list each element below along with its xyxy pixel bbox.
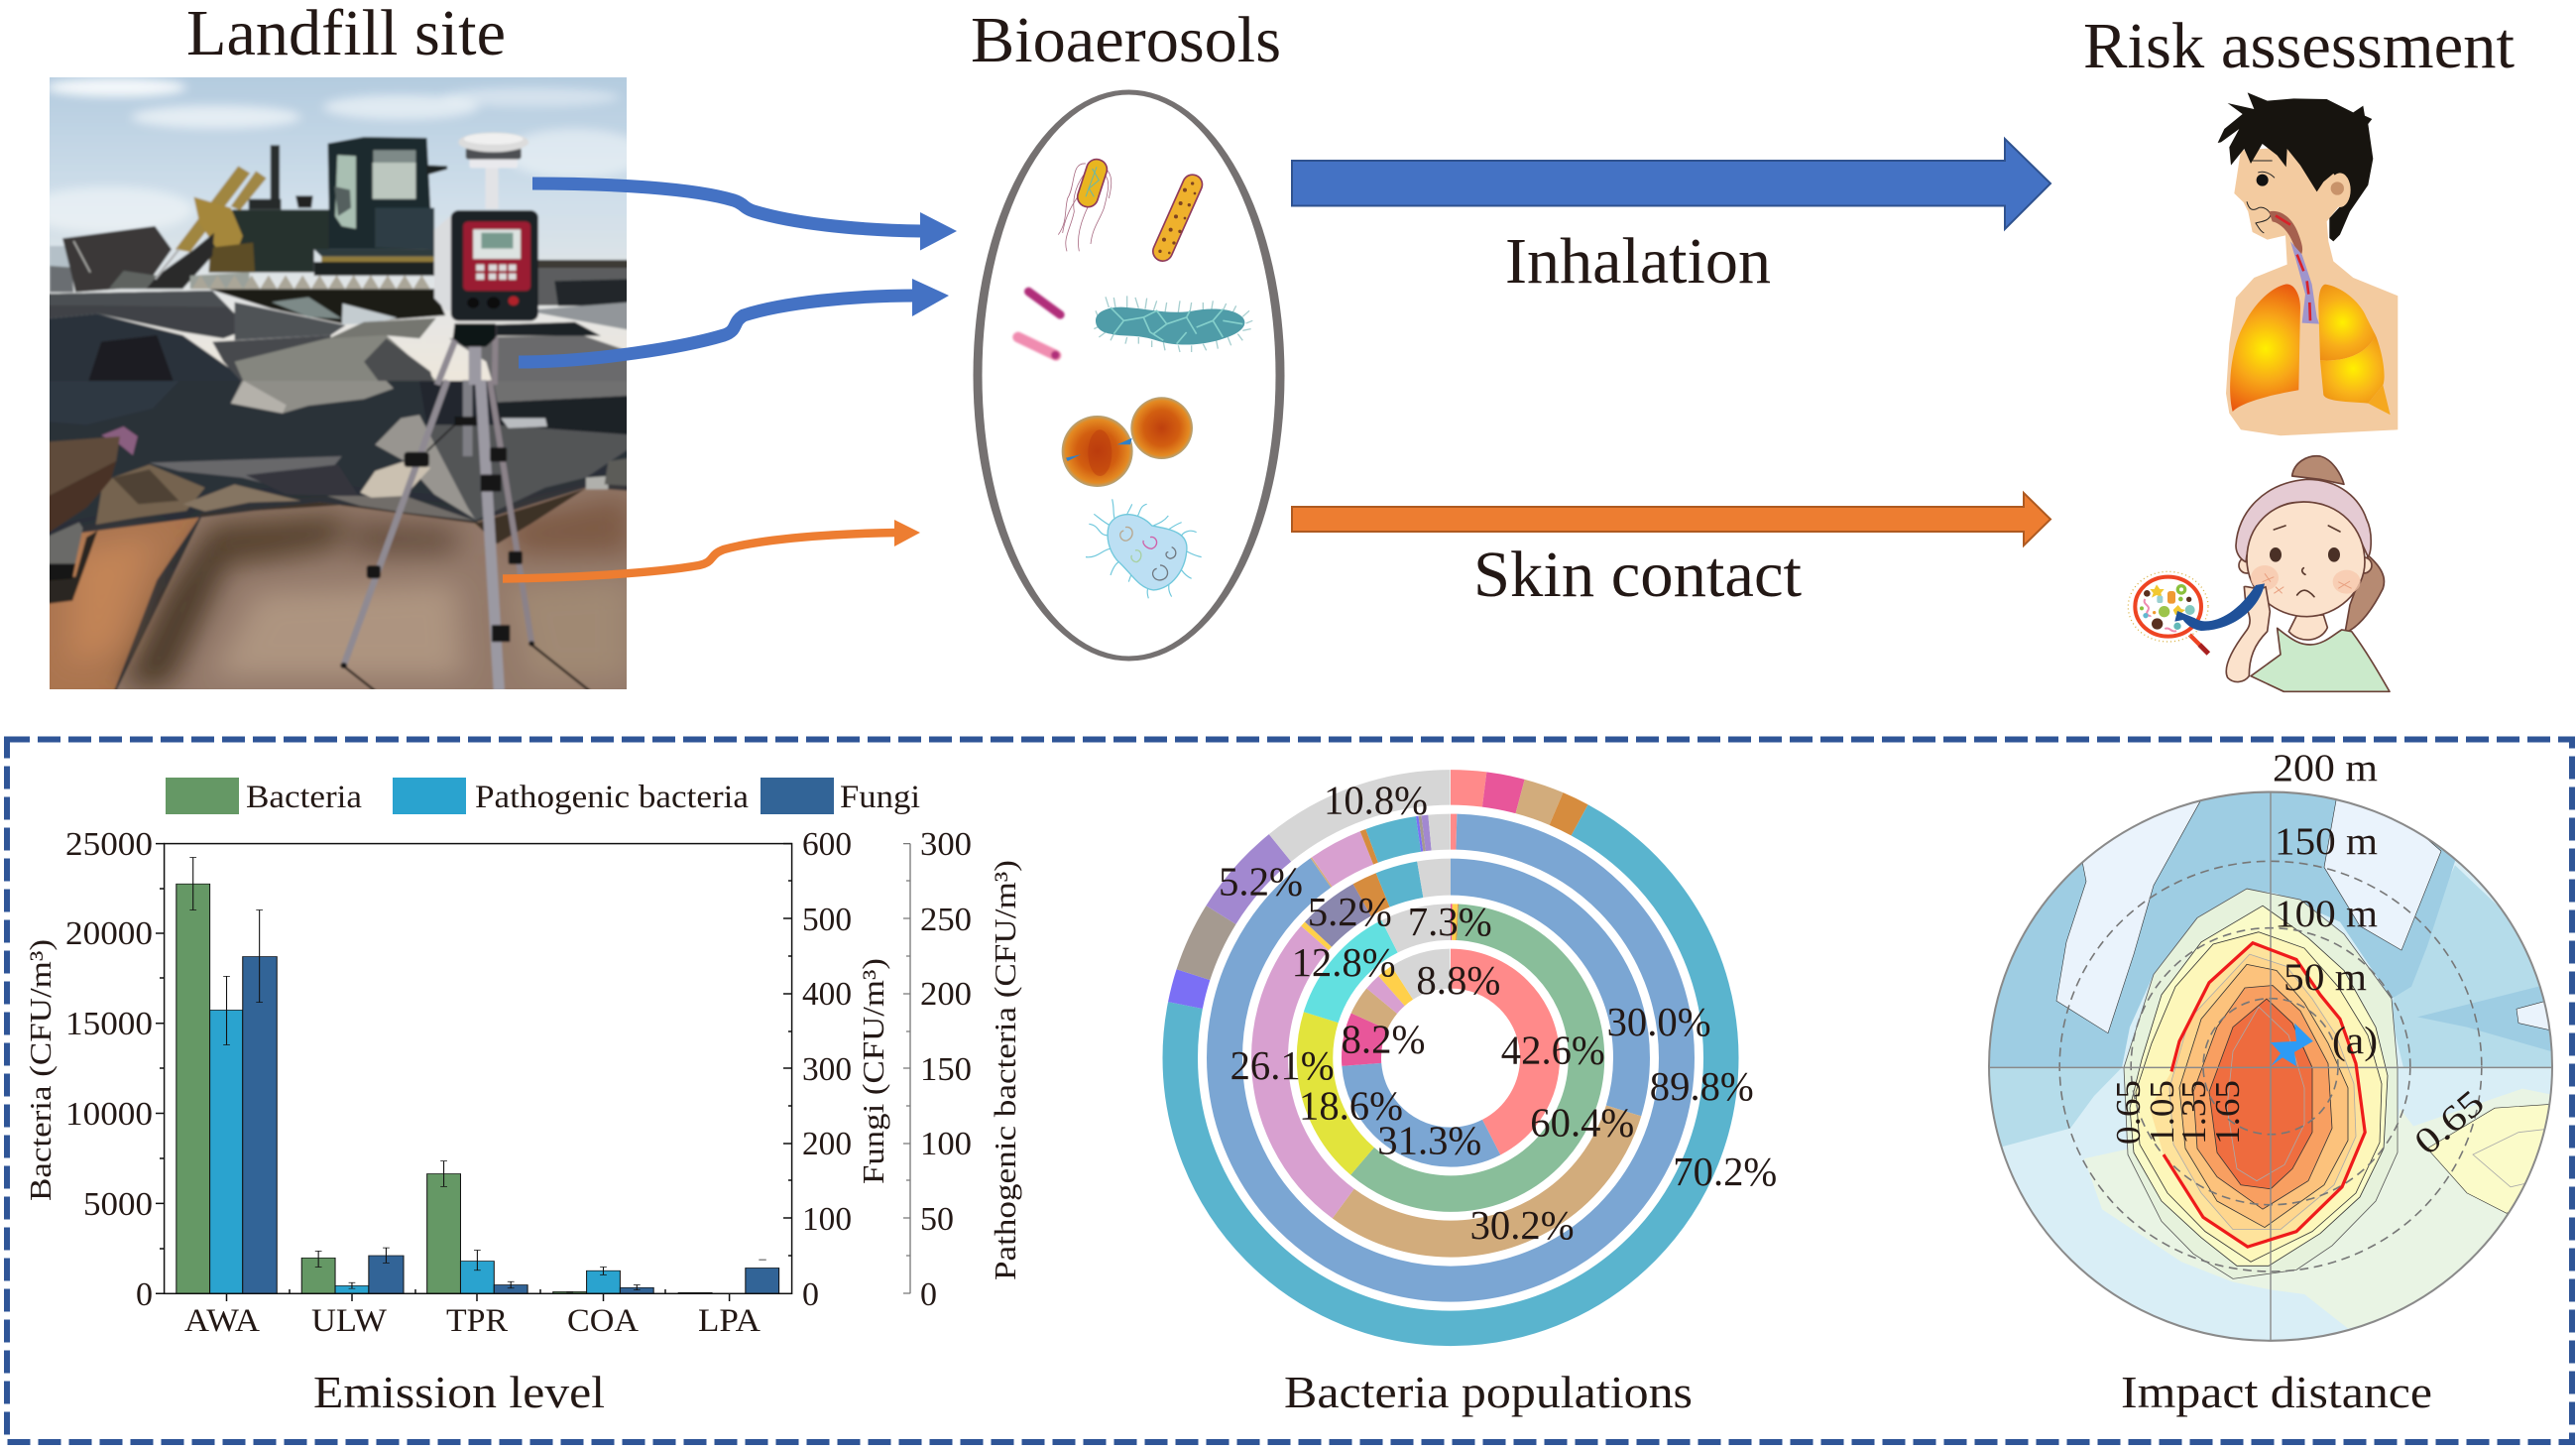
pathogenic axis labels (920, 826, 972, 1313)
distance labels: (a) (2332, 1020, 2378, 1062)
bar chart: emission level (23, 778, 1022, 1339)
heading: Impact distance: Impact distance (2121, 1367, 2432, 1417)
magnifier with germs (2128, 571, 2208, 654)
contour value labels: 1.65 (2208, 1080, 2247, 1145)
fungi axis labels: 0 (802, 1276, 819, 1313)
category labels: ULW (311, 1303, 388, 1339)
fungi axis labels (802, 826, 852, 1313)
icon: girl with skin irritation and magnifier (2128, 456, 2390, 691)
pathogenic axis labels: 300 (920, 826, 972, 863)
microbe illustrations (1018, 157, 1252, 598)
contour fields (1979, 781, 2566, 1347)
pathogenic axis labels: 100 (920, 1126, 972, 1162)
error bars (189, 857, 766, 1292)
legend (166, 778, 920, 815)
ring 2 (1225, 832, 1677, 1284)
label: Inhalation: Inhalation (1505, 225, 1771, 298)
donut percentage labels: 7.3% (1408, 899, 1492, 944)
contour value labels (2109, 1080, 2493, 1163)
icon: person with lungs (2218, 92, 2398, 435)
distance labels: 50 m (2283, 956, 2367, 999)
fungi axis labels: 200 (802, 1126, 852, 1162)
arrow: inhalation (1292, 139, 2050, 229)
tarp foreground (419, 424, 631, 521)
category labels (184, 1303, 761, 1339)
heading: Bacteria populations: Bacteria populations (1284, 1367, 1693, 1417)
donut percentage labels: 30.0% (1607, 999, 1711, 1044)
y axis title: fungi: Fungi (CFU/m³) (856, 958, 890, 1184)
distance labels: 100 m (2275, 893, 2378, 935)
y axis title: pathogenic bacteria: Pathogenic bacteria (CFU/m³) (988, 860, 1022, 1280)
left pipe debris (46, 531, 98, 604)
fungi axis labels: 300 (802, 1051, 852, 1088)
ground (46, 518, 199, 691)
donut percentage labels: 70.2% (1673, 1149, 1777, 1194)
arrow: blue curved flow 2 (519, 279, 949, 362)
photo upper half (24, 78, 645, 387)
donut percentage labels: 8.2% (1341, 1017, 1426, 1062)
sampler on tripod (434, 132, 538, 385)
donut percentage labels: 8.8% (1416, 957, 1500, 1003)
donut percentage labels: 60.4% (1530, 1099, 1634, 1145)
donut percentage labels: 12.8% (1292, 939, 1396, 985)
horizon scrap (50, 245, 71, 268)
legend: Pathogenic bacteria (475, 780, 749, 815)
microbe: blue amoeba (1086, 499, 1202, 598)
red threshold contour (2164, 943, 2365, 1247)
microbe: orange rod (1158, 181, 1196, 254)
title: Risk assessment: Risk assessment (2083, 10, 2515, 82)
donut percentage labels: 31.3% (1377, 1118, 1481, 1163)
axes (1979, 785, 2566, 1347)
pathogenic axis labels: 200 (920, 976, 972, 1013)
heading: Emission level: Emission level (313, 1367, 605, 1417)
bars (176, 857, 779, 1293)
arrow: skin contact (1292, 493, 2050, 545)
ring 3 (1269, 877, 1632, 1239)
legend: Fungi (840, 780, 920, 815)
title: Bioaerosols: Bioaerosols (971, 4, 1281, 76)
donut percentage labels: 89.8% (1650, 1063, 1754, 1109)
category labels: TPR (446, 1303, 508, 1339)
donut chart: bacteria populations (1180, 778, 1777, 1328)
range circles (2059, 861, 2482, 1271)
fungi axis labels: 600 (802, 826, 852, 863)
contour value labels: 0.65 (2406, 1082, 2493, 1163)
microbe: orange dividing cells (1062, 397, 1193, 487)
pathogenic axis labels: 0 (920, 1276, 937, 1313)
arrow: blue curved flow 1 (532, 183, 957, 250)
bulldozer (62, 137, 447, 324)
icon: wind rose star (2271, 1024, 2313, 1066)
donut percentage labels: 10.8% (1324, 778, 1428, 823)
label: Skin contact: Skin contact (1473, 539, 1802, 611)
pathogenic axis labels: 150 (920, 1051, 972, 1088)
category labels: LPA (698, 1303, 761, 1339)
microbe: teal cell with hairs (1094, 296, 1252, 352)
legend: Bacteria (246, 780, 362, 815)
cloth and log (101, 426, 138, 455)
donut percentage labels: 18.6% (1299, 1083, 1403, 1129)
tripod shadows (344, 645, 590, 691)
debris and soil (208, 289, 445, 323)
distance labels (2273, 747, 2378, 1062)
panel: dashed border for results (7, 740, 2572, 1442)
arrow: orange curved flow (503, 520, 920, 579)
clouds (24, 78, 645, 233)
left axis labels: 25000 (65, 826, 153, 863)
left axis labels: 15000 (65, 1006, 153, 1042)
donut percentage labels: 5.2% (1308, 889, 1392, 934)
fungi axis labels: 100 (802, 1201, 852, 1238)
contour value labels: 1.35 (2174, 1080, 2213, 1145)
left axis labels (65, 826, 153, 1313)
distance labels: 200 m (2273, 747, 2378, 789)
tarp pieces (46, 291, 631, 387)
pathogenic axis labels: 250 (920, 902, 972, 938)
microbe: pink rods (1018, 292, 1060, 359)
category labels: COA (567, 1303, 639, 1339)
left axis labels: 20000 (65, 915, 153, 952)
ring 1 (1180, 787, 1721, 1328)
tripod legs lower (344, 380, 531, 691)
category labels: AWA (184, 1303, 260, 1339)
panel: bioaerosols ellipse with microbes (974, 89, 1285, 661)
ring 5 (1361, 969, 1540, 1148)
donut percentage labels: 5.2% (1219, 858, 1303, 904)
contour value labels: 0.65 (2109, 1080, 2148, 1145)
left axis labels: 0 (136, 1276, 153, 1313)
distance labels: 150 m (2275, 820, 2378, 863)
fungi axis labels: 500 (802, 902, 852, 938)
plot frame (165, 844, 792, 1293)
oval outline (974, 89, 1285, 661)
left axis labels: 10000 (65, 1096, 153, 1133)
donut percentage labels: 42.6% (1501, 1027, 1605, 1072)
ring 4 (1315, 922, 1586, 1194)
y axis title: bacteria: Bacteria (CFU/m³) (23, 939, 58, 1201)
outer circle (1989, 792, 2552, 1341)
pathogenic axis labels: 50 (920, 1201, 954, 1238)
polar contour map: impact distance (1979, 747, 2566, 1347)
fungi axis labels: 400 (802, 976, 852, 1013)
donut percentage labels: 30.2% (1470, 1202, 1575, 1248)
microbe: flagellated bacterium (1058, 157, 1112, 251)
left axis labels: 5000 (83, 1186, 153, 1223)
contour value labels: 1.05 (2143, 1080, 2181, 1145)
donut percentage labels: 26.1% (1230, 1042, 1335, 1088)
axes ticks (156, 844, 792, 1301)
photo: landfill site with sampler on tripod (24, 73, 645, 693)
donut percentage labels (1219, 778, 1777, 1248)
photo lower half (46, 380, 631, 691)
